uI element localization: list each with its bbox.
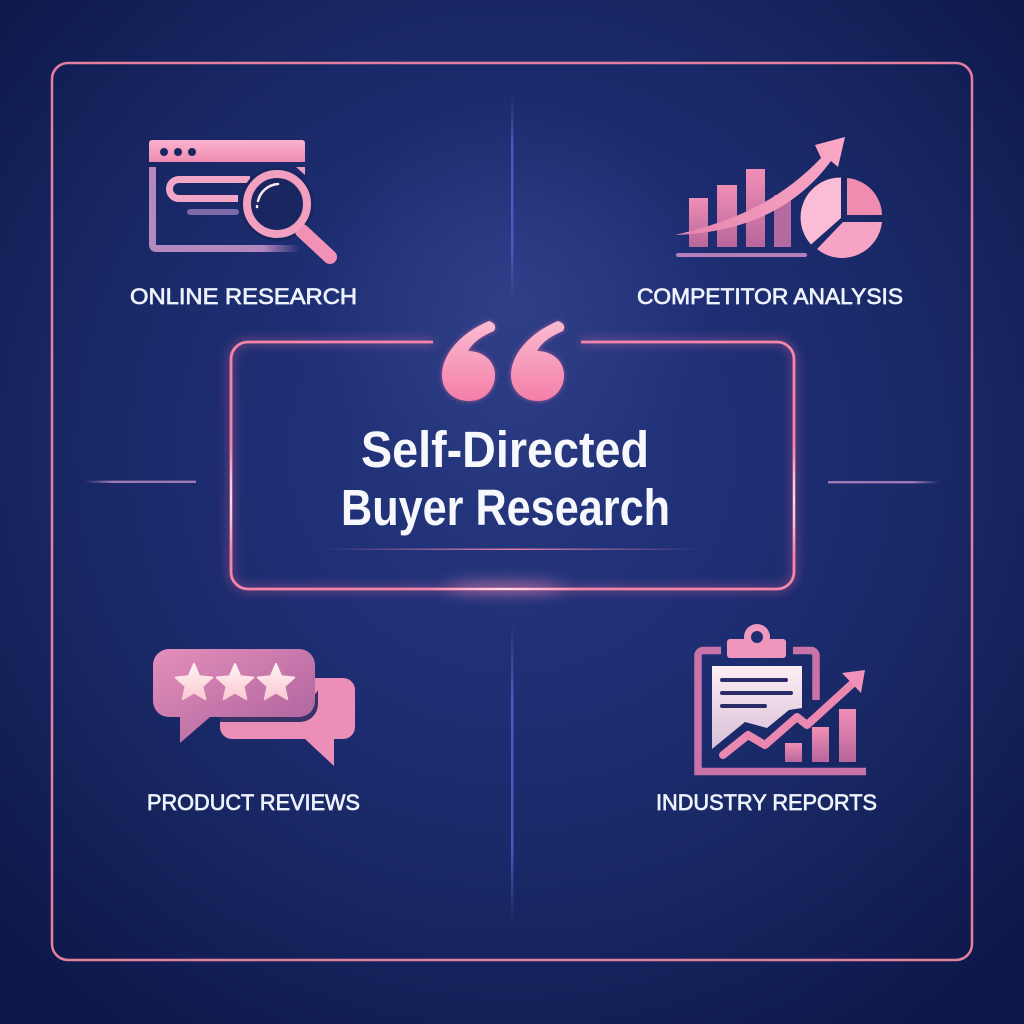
icon: quotation marks: [442, 321, 564, 401]
panel: online research: [130, 140, 357, 309]
box glow: [231, 342, 794, 589]
divider: left horizontal: [85, 481, 196, 483]
title line 2: Buyer Research: [341, 479, 670, 536]
icon: speech bubbles with stars: [153, 649, 355, 766]
box outline: [231, 342, 794, 589]
panel: central quote box: [230, 321, 795, 591]
label: INDUSTRY REPORTS: [656, 790, 877, 815]
central glow: [300, 100, 724, 500]
underline: [321, 548, 704, 550]
label: ONLINE RESEARCH: [130, 284, 357, 309]
icon: browser with magnifier: [149, 140, 330, 257]
panel: competitor analysis: [637, 137, 903, 309]
panel: product reviews: [147, 649, 360, 815]
bottom bright line: [430, 588, 580, 590]
divider: bottom vertical: [511, 622, 513, 922]
label: PRODUCT REVIEWS: [147, 790, 360, 815]
quote mark glow: [442, 321, 564, 401]
title: Self-Directed: [361, 421, 649, 478]
divider: top vertical: [511, 96, 513, 300]
icon: bar chart, growth arrow and pie: [675, 137, 882, 258]
divider: right horizontal: [828, 481, 940, 483]
icon: clipboard, report and chart: [698, 624, 866, 772]
outer frame: [52, 63, 972, 960]
left bright line: [230, 450, 232, 550]
right bright line: [793, 450, 795, 550]
panel: industry reports: [656, 624, 877, 815]
bottom hot spot: [445, 583, 565, 591]
label: COMPETITOR ANALYSIS: [637, 284, 903, 309]
